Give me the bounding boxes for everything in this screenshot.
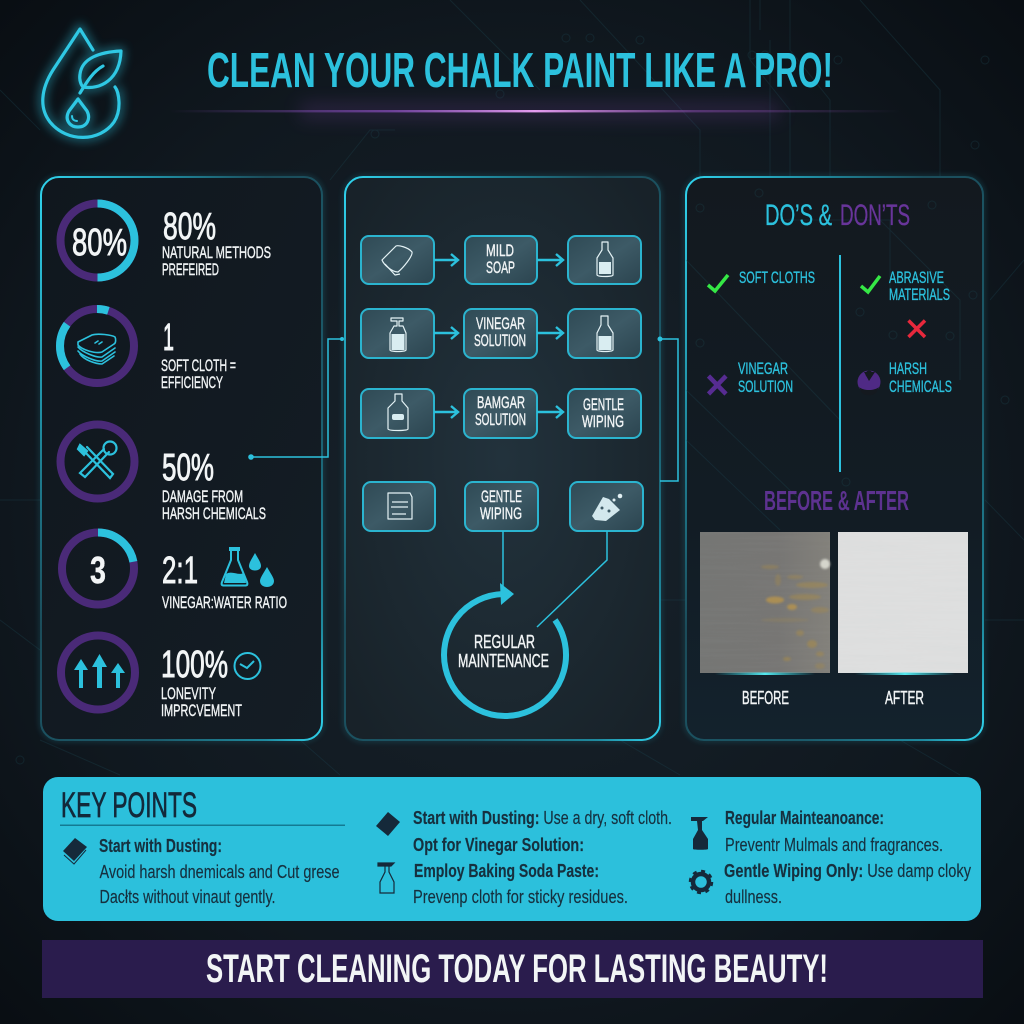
- item: harsh chemicals: HARSH: [889, 359, 927, 378]
- heading: do's and don'ts: DON’TS: [840, 199, 910, 232]
- panel circuit traces: [686, 189, 977, 530]
- column 3: Gentle Wiping Only: Use damp cloky: [724, 860, 972, 881]
- stat: 1 soft cloth: EFFICIENCY: [161, 373, 223, 392]
- cycle arrow: regular maintenance: MAINTENANCE: [458, 651, 549, 671]
- item: vinegar solution: [708, 359, 793, 396]
- stat: 100% longevity: IMPRCVEMENT: [161, 701, 242, 720]
- underline: [60, 824, 345, 826]
- icon: cloth: [376, 812, 400, 836]
- connector lines: [503, 531, 607, 627]
- stat: 100% longevity: LONEVITY: [161, 684, 216, 703]
- icon: spray bottle: [691, 817, 708, 850]
- column 1: Avoid harsh dnemicals and Cut grese: [100, 861, 340, 882]
- heading: do's and don'ts: [765, 199, 910, 232]
- heading: do's and don'ts: DO’S &: [765, 199, 832, 232]
- panel frame: [345, 177, 660, 740]
- column 1: [63, 835, 340, 907]
- stat: 50% damage: [60, 424, 266, 523]
- do: soft cloths: [708, 268, 815, 291]
- icon: pump bottle: [390, 318, 406, 352]
- icon: red cross: [908, 320, 925, 337]
- divider: [839, 255, 841, 472]
- stat: 100% longevity: 100%: [161, 644, 228, 686]
- stat: 100% longevity: [61, 636, 260, 720]
- item: abrasive materials: [861, 268, 950, 304]
- heading: before and after: BEFORE & AFTER: [764, 485, 909, 516]
- panel: do's and don'ts, before and after: [686, 177, 983, 740]
- icon: stacked cloths: [78, 334, 116, 364]
- panel: cleaning process: [345, 177, 660, 740]
- cycle arrow: regular maintenance: [444, 583, 566, 716]
- stat: 80% natural methods: PREFEIRED: [162, 260, 219, 279]
- icon: clock: [234, 653, 260, 679]
- column 1: Dacłts without vinaut gently.: [100, 886, 276, 907]
- flow row 1: SOAP: [486, 258, 515, 277]
- column 2: Start with Dusting: Use a dry, soft cloth.: [413, 807, 672, 828]
- connector: process to do's and don'ts: [658, 336, 678, 481]
- flow row 4: [363, 482, 643, 531]
- panel frame: [41, 177, 322, 740]
- stat: 50% damage: 50%: [162, 447, 214, 489]
- flow row 3: BAMGAR: [477, 393, 525, 412]
- stat: 1 soft cloth: [60, 309, 236, 392]
- flow row 2: VINEGAR: [476, 314, 525, 333]
- image: after: [838, 532, 968, 675]
- panel: key points: [43, 777, 981, 921]
- column 3: dullness.: [725, 886, 782, 907]
- flow row 4: GENTLE: [481, 487, 522, 506]
- icon: spray bottle: [378, 863, 394, 893]
- column 2: Opt for Vinegar Solution:: [413, 834, 584, 855]
- icon: sponge with bubbles: [592, 494, 622, 521]
- item: vinegar solution: SOLUTION: [738, 377, 793, 396]
- call to action banner: [42, 940, 983, 998]
- column 1: Start with Dusting:: [99, 835, 222, 856]
- column 2: Employ Baking Soda Paste:: [414, 860, 599, 881]
- flow row 2: SOLUTION: [474, 331, 526, 350]
- stat: 80% natural methods: 80%: [163, 206, 216, 248]
- icon: gear: [690, 871, 712, 893]
- icon: jar bottle: [388, 394, 408, 430]
- cycle arrow: regular maintenance: REGULAR: [474, 632, 535, 652]
- item: harsh chemicals: CHEMICALS: [889, 377, 952, 396]
- label: after: AFTER: [885, 688, 924, 708]
- icon: cloth: [63, 838, 87, 864]
- flow row 1: MILD: [486, 241, 514, 260]
- item: abrasive materials: MATERIALS: [889, 285, 950, 304]
- flow row 3: GENTLE: [583, 395, 624, 414]
- stat: 1 soft cloth: 1: [163, 317, 174, 359]
- stat: 1 soft cloth: SOFT CLOTH =: [161, 356, 236, 375]
- item: vinegar solution: VINEGAR: [738, 359, 788, 378]
- icon: water drop with leaf logo: [42, 28, 121, 137]
- column 3: Regular Mainteanoance:: [725, 807, 884, 828]
- rust specks: [761, 565, 829, 669]
- icon: flask and drops: [222, 547, 274, 587]
- icon: bottle: [597, 316, 613, 352]
- stat: 2:1 ratio: 3: [90, 550, 106, 592]
- icon: cloth: [382, 246, 412, 275]
- stat: 80% natural methods: NATURAL METHODS: [162, 243, 271, 262]
- icon: bottle: [597, 242, 613, 276]
- flow row 4: WIPING: [480, 504, 522, 523]
- column 2: Prevenp cloth for sticky residues.: [413, 886, 628, 907]
- flow row 3: SOLUTION: [475, 410, 526, 429]
- icon: baking soda box: [388, 493, 412, 519]
- circuit background pattern: [0, 0, 1024, 775]
- flow row 3: WIPING: [582, 412, 624, 431]
- flow row 1: [361, 236, 641, 284]
- stat: 80% natural methods: [60, 204, 271, 279]
- image: before: [700, 532, 830, 675]
- connector: stats to process: [248, 337, 344, 460]
- flow row 2: [361, 309, 641, 358]
- icon: up arrows: [74, 654, 125, 688]
- column 3: Preventr Mulmals and fragrances.: [725, 834, 943, 855]
- column 2: [376, 807, 672, 907]
- panel: statistics: [41, 177, 322, 740]
- glowing purple divider: [170, 104, 900, 118]
- stat: 80% natural methods: 80%: [72, 222, 127, 264]
- flow row 3: [361, 389, 641, 438]
- stat: 2:1 ratio: 2:1: [162, 550, 198, 592]
- heading: key points: KEY POINTS: [61, 786, 197, 825]
- stat: 50% damage: DAMAGE FROM: [162, 487, 243, 506]
- label: before: BEFORE: [742, 688, 789, 708]
- do: soft cloths: SOFT CLOTHS: [739, 268, 815, 287]
- item: abrasive materials: ABRASIVE: [889, 268, 944, 287]
- stat: 50% damage: HARSH CHEMICALS: [162, 504, 266, 523]
- column 3: [690, 807, 972, 907]
- stat: 2:1 ratio: VINEGAR:WATER RATIO: [162, 593, 287, 612]
- item: harsh chemicals: [858, 359, 952, 396]
- icon: crossed tools: [78, 442, 116, 478]
- panel frame: [686, 177, 983, 740]
- stat: 2:1 ratio: [62, 532, 287, 612]
